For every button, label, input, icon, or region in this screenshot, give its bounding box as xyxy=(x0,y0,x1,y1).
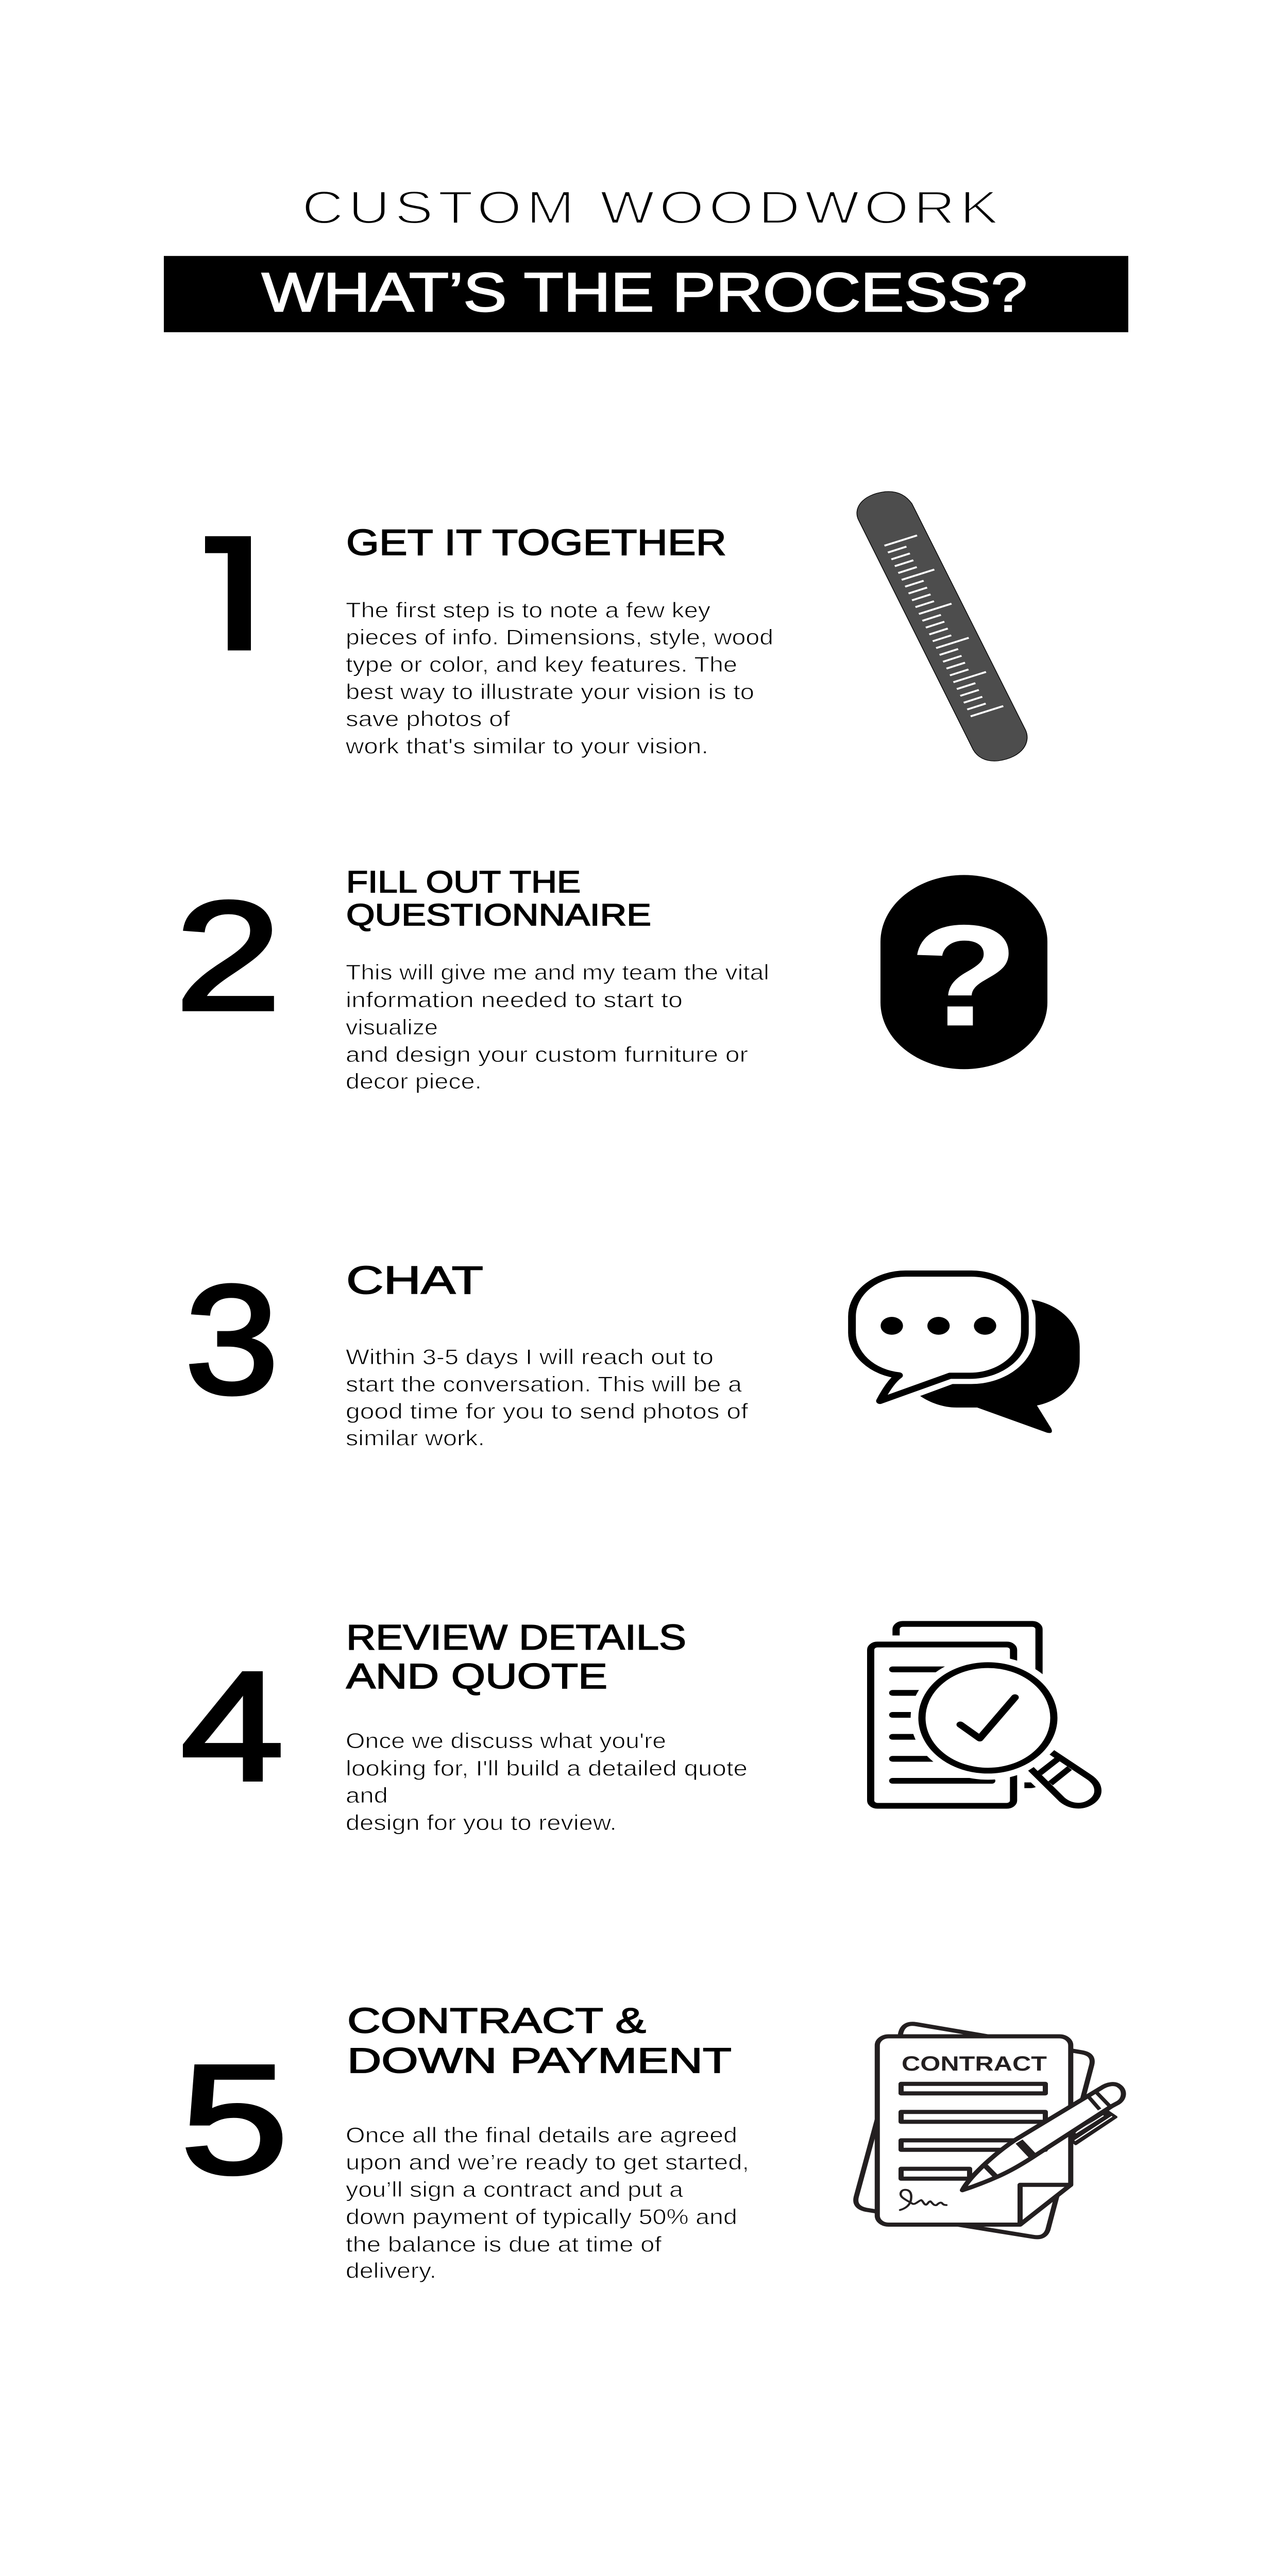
icon: document with magnifier xyxy=(871,1624,1098,1806)
text block: step 5 body: down payment of typically 50% and xyxy=(346,2205,737,2229)
text block: step 4 body: looking for, I'll build a detailed quote xyxy=(346,1756,748,1780)
number 4: 4 xyxy=(181,1640,284,1813)
number 5: 5 xyxy=(180,2033,289,2206)
text block: step 4 body: Once we discuss what you're xyxy=(346,1728,666,1753)
text block: step 1 body: type or color, and key features. The xyxy=(346,652,737,676)
heading: contract and down payment xyxy=(347,2001,732,2080)
panel: step 2 xyxy=(175,865,1047,1093)
text block: step 1 body xyxy=(345,598,773,758)
text block: step 5 body: you’ll sign a contract and put a xyxy=(346,2177,684,2201)
number 1 xyxy=(205,536,251,650)
text block: step 4 body: and xyxy=(346,1783,388,1807)
panel: step 5 xyxy=(180,2001,1124,2282)
panel: step 4 xyxy=(181,1618,1098,1835)
text block: step 4 body: design for you to review. xyxy=(346,1810,617,1835)
icon: contract with pen: CONTRACT xyxy=(902,2052,1047,2075)
banner: what's the process: WHAT’S THE PROCESS? xyxy=(262,262,1027,323)
heading: review details and quote: AND QUOTE xyxy=(346,1656,607,1696)
text block: step 5 body: delivery. xyxy=(346,2259,436,2282)
heading: review details and quote: REVIEW DETAILS xyxy=(346,1618,686,1657)
title xyxy=(164,182,1128,332)
text block: step 2 body xyxy=(346,960,769,1093)
text block: step 1 body: The first step is to note a few key xyxy=(346,598,710,622)
icon: question mark pill: ? xyxy=(909,895,1019,1056)
icon: ruler xyxy=(857,492,1027,761)
text block: step 2 body: visualize xyxy=(346,1015,438,1039)
heading: fill out the questionnaire: FILL OUT THE xyxy=(346,865,581,899)
text block: step 3 body xyxy=(346,1345,749,1450)
heading: custom woodwork: CUSTOM WOODWORK xyxy=(302,182,998,233)
text block: step 5 body: the balance is due at time of xyxy=(346,2232,662,2256)
number 1: 1 xyxy=(185,509,293,682)
panel: step 3 xyxy=(185,1253,1080,1450)
heading: get it together: GET IT TOGETHER xyxy=(346,522,726,563)
number 2: 2 xyxy=(175,870,281,1043)
heading: contract and down payment: CONTRACT & xyxy=(347,2001,646,2041)
heading: fill out the questionnaire: QUESTIONNAIRE xyxy=(346,898,651,932)
heading: chat: CHAT xyxy=(346,1259,483,1302)
text block: step 5 body: upon and we’re ready to get started, xyxy=(346,2150,749,2174)
heading: review details and quote xyxy=(346,1618,686,1696)
panel: step 1 xyxy=(185,492,1027,761)
text block: step 5 body xyxy=(346,2123,749,2282)
icon: contract with pen xyxy=(856,2024,1124,2237)
text block: step 1 body: pieces of info. Dimensions, style, wood xyxy=(346,625,773,649)
text block: step 3 body: similar work. xyxy=(346,1426,485,1450)
number 3: 3 xyxy=(185,1253,279,1426)
text block: step 1 body: best way to illustrate your vision is to xyxy=(346,680,754,704)
heading: fill out the questionnaire xyxy=(346,865,651,932)
text block: step 2 body: and design your custom furniture or xyxy=(346,1042,748,1066)
icon: question mark pill xyxy=(880,875,1047,1069)
text block: step 2 body: information needed to start to xyxy=(346,988,683,1012)
text block: step 3 body: good time for you to send photos of xyxy=(346,1399,749,1423)
heading: contract and down payment: DOWN PAYMENT xyxy=(347,2041,732,2080)
icon: chat bubbles xyxy=(852,1274,1080,1433)
text block: step 3 body: Within 3-5 days I will reach out to xyxy=(346,1345,714,1369)
text block: step 5 body: Once all the final details are agreed xyxy=(346,2123,737,2147)
text block: step 1 body: work that's similar to your vision. xyxy=(345,734,708,758)
text block: step 2 body: This will give me and my team the vital xyxy=(346,960,769,984)
banner: what's the process xyxy=(164,256,1128,332)
text block: step 4 body xyxy=(346,1728,748,1835)
text block: step 1 body: save photos of xyxy=(346,707,511,731)
text block: step 2 body: decor piece. xyxy=(346,1069,482,1093)
text block: step 3 body: start the conversation. This will be a xyxy=(346,1372,742,1396)
